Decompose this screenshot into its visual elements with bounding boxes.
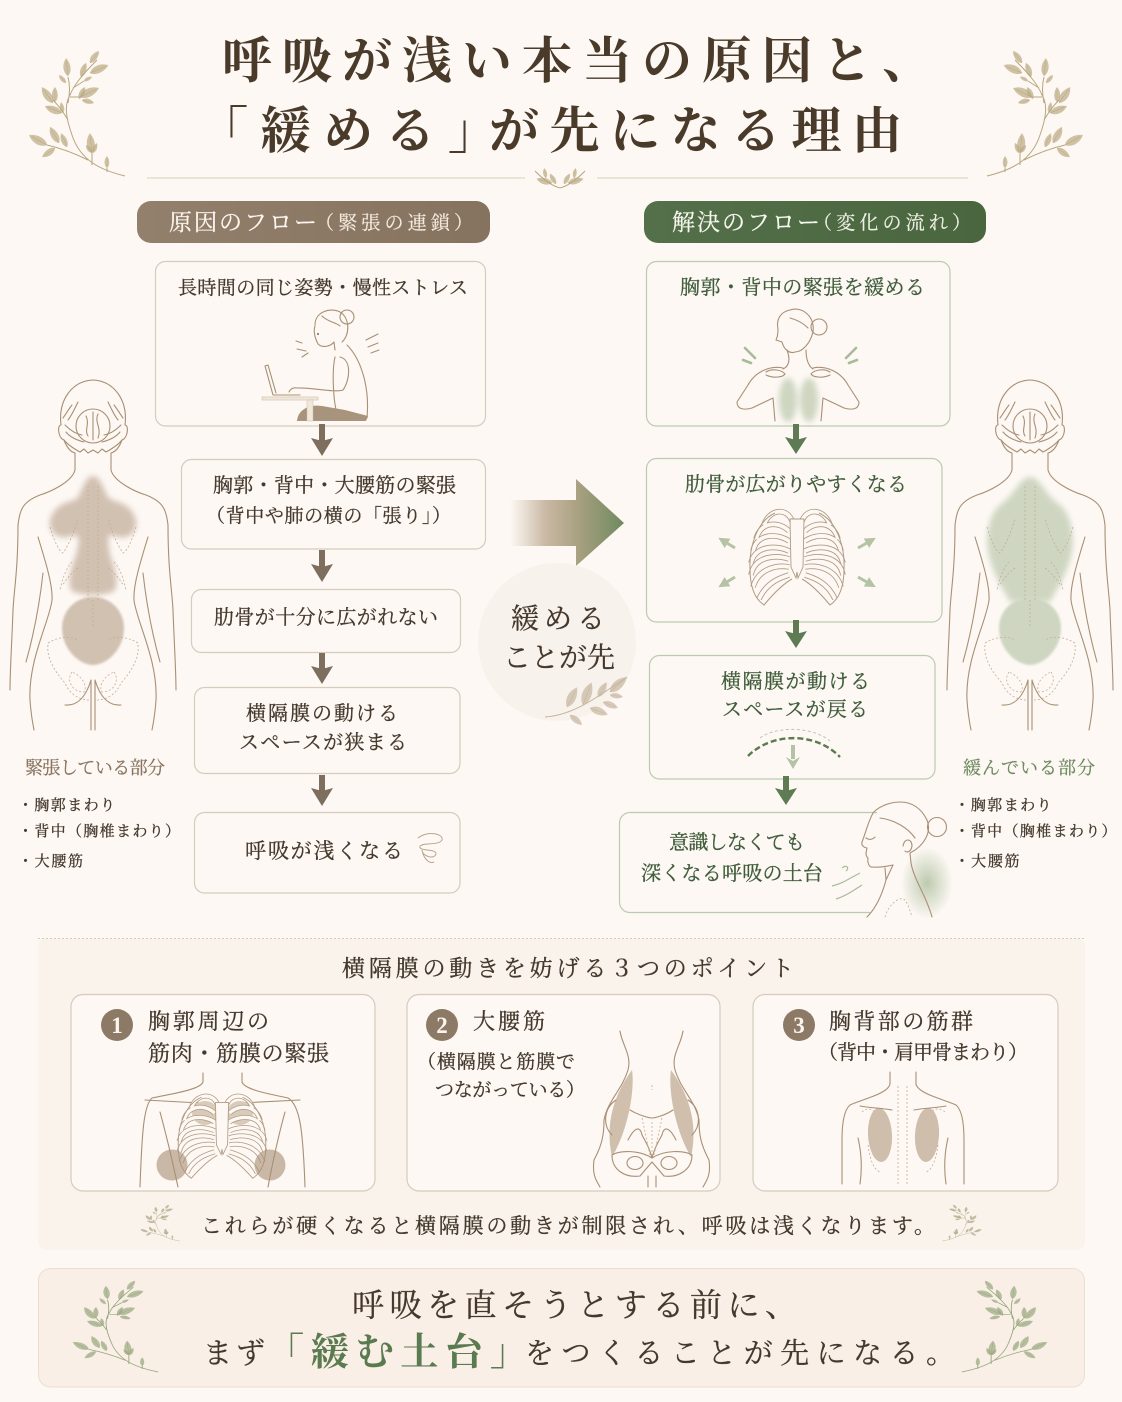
heading pill: solution flow: 解決のフロー [672, 210, 820, 235]
card: point 2: 2 [436, 1013, 448, 1038]
heading: three points: 横隔膜の動きを妨げる３つのポイント [342, 956, 794, 981]
icon: upper back muscles [842, 1072, 964, 1185]
card: point 1 [71, 994, 375, 1191]
arrow [311, 550, 333, 582]
solution step 4: base for deep breathing [620, 802, 953, 919]
icon: rib cage [750, 512, 844, 605]
text: bottom message line 2: をつくることが先になる。 [525, 1337, 955, 1370]
heading pill: cause flow: （緊張の連鎖） [315, 212, 473, 234]
icon: green sprig left [71, 1279, 158, 1372]
legend: tense parts [18, 758, 180, 870]
legend: tense parts: ・大腰筋 [18, 853, 83, 870]
icon: title sprig right [987, 49, 1085, 176]
icon: woman at laptop [262, 310, 379, 421]
cause step 1: long hours same posture [156, 262, 486, 426]
icon: psoas muscle [593, 1031, 710, 1187]
solution step 2: ribs expand: 肋骨が広がりやすくなる [685, 473, 907, 496]
icon: small sprig left [140, 1204, 180, 1241]
icon: title sprig left [27, 49, 125, 176]
cause step 4: less diaphragm space [194, 688, 460, 774]
icon: woman profile breathing [832, 802, 953, 919]
heading pill: cause flow [137, 201, 490, 243]
card: point 1: 1 [111, 1013, 123, 1038]
callout: relaxing comes first: ことが先 [503, 642, 615, 674]
panel: three points [38, 938, 1085, 1250]
card: point 2 [407, 994, 720, 1191]
card: point 2: （横隔膜と筋膜で [417, 1051, 575, 1073]
body figure: tense areas [10, 380, 176, 730]
card: point 3: 3 [793, 1013, 805, 1038]
card: point 3: 胸背部の筋群 [829, 1009, 973, 1034]
arrow [311, 653, 333, 684]
cause step 1: long hours same posture: 長時間の同じ姿勢・慢性ストレス [178, 277, 468, 299]
title: 呼吸が浅い本当の原因と、 [222, 33, 932, 89]
text: bottom message line 2: まず [203, 1337, 265, 1370]
solution step 3: diaphragm space returns: 横隔膜が動ける [721, 670, 870, 693]
card: point 1: 胸郭周辺の [148, 1009, 269, 1034]
legend: relaxed parts: ・大腰筋 [954, 853, 1020, 870]
legend: tense parts: ・背中（胸椎まわり） [18, 822, 180, 840]
icon: small sprig right [942, 1204, 982, 1241]
legend: tense parts: ・胸郭まわり [18, 796, 115, 814]
card: point 2: つながっている） [435, 1079, 585, 1101]
heading pill: solution flow [644, 201, 986, 243]
body figure: relaxed areas [947, 380, 1113, 730]
card: point 1: 筋肉・筋膜の緊張 [148, 1041, 329, 1066]
arrow [785, 620, 807, 648]
heading pill: solution flow: （変化の流れ） [813, 212, 971, 234]
legend: tense parts: 緊張している部分 [25, 758, 165, 778]
title divider [147, 168, 968, 188]
cause step 5: shallow breathing: 呼吸が浅くなる [245, 839, 403, 863]
text: bottom message line 2: 「緩む土台」 [266, 1332, 528, 1374]
icon: shallow breath swirl [418, 834, 442, 862]
solution step 1: release tension: 胸郭・背中の緊張を緩める [680, 276, 925, 299]
icon: diaphragm dome [748, 729, 840, 769]
cause step 2: tension: （背中や肺の横の「張り」） [206, 505, 451, 527]
arrow [775, 776, 797, 805]
heading pill: cause flow: 原因のフロー [169, 210, 317, 235]
cause step 5: shallow breathing [194, 812, 460, 893]
card: point 3: （背中・肩甲骨まわり） [818, 1041, 1028, 1064]
arrow [311, 424, 333, 456]
solution step 4: base for deep breathing: 深くなる呼吸の土台 [641, 862, 823, 885]
solution step 4: base for deep breathing: 意識しなくても [669, 831, 805, 854]
cause step 2: tension [182, 460, 486, 549]
card: point 3 [753, 994, 1058, 1191]
cause step 2: tension: 胸郭・背中・大腰筋の緊張 [213, 474, 456, 497]
arrow: cause to solution [510, 479, 624, 566]
title [198, 33, 932, 159]
cause step 3: ribs cannot expand: 肋骨が十分に広がれない [214, 606, 438, 629]
icon: expansion arrows [722, 540, 872, 585]
title: 「緩める」 [198, 103, 498, 159]
solution step 3: diaphragm space returns [650, 656, 935, 779]
callout: relaxing comes first: 緩める [511, 603, 605, 635]
card: point 2: 大腰筋 [473, 1009, 545, 1034]
title: が先になる理由 [489, 103, 902, 159]
icon: woman back, hands on shoulders [737, 309, 859, 422]
cause step 4: less diaphragm space: スペースが狭まる [239, 731, 407, 754]
legend: relaxed parts: ・胸郭まわり [954, 796, 1052, 814]
icon: green sprig right [962, 1279, 1049, 1372]
panel: bottom message [38, 1268, 1084, 1387]
solution step 2: ribs expand [646, 458, 942, 622]
icon: chest skeleton [140, 1073, 305, 1187]
arrow [311, 775, 333, 806]
cause step 4: less diaphragm space: 横隔膜の動ける [246, 702, 398, 725]
callout: relaxing comes first [478, 563, 636, 727]
legend: relaxed parts [954, 758, 1116, 870]
text: bottom message line 1: 呼吸を直そうとする前に、 [352, 1287, 797, 1323]
legend: relaxed parts: ・背中（胸椎まわり） [954, 822, 1116, 840]
icon: callout sprig [545, 674, 630, 727]
solution step 3: diaphragm space returns: スペースが戻る [722, 698, 868, 721]
solution step 1: release tension [646, 262, 950, 426]
cause step 3: ribs cannot expand [192, 590, 460, 652]
legend: relaxed parts: 緩んでいる部分 [963, 758, 1095, 778]
arrow [785, 424, 807, 454]
text: conclusion of points: これらが硬くなると横隔膜の動きが制限され、呼吸は浅くなります。 [201, 1214, 935, 1238]
text: bottom message line 2 [203, 1332, 955, 1374]
